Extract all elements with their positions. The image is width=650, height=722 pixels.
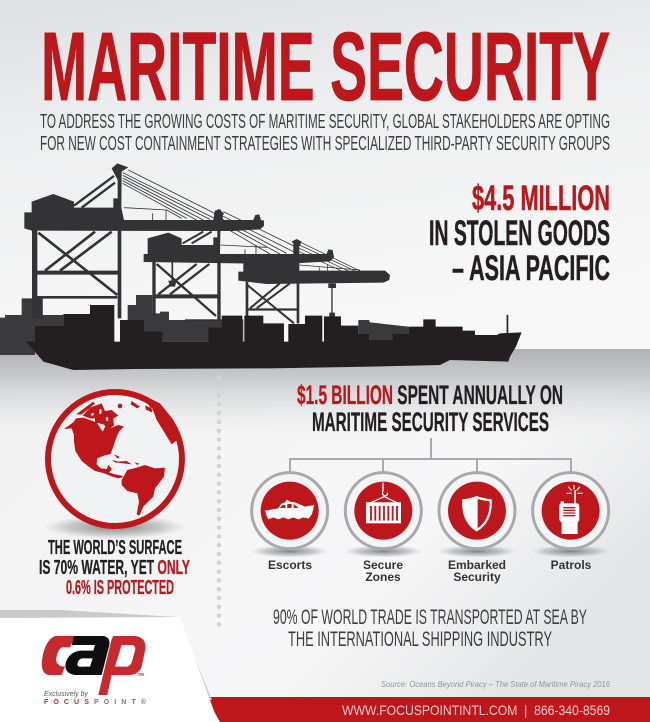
cap logo: TM (138, 672, 144, 677)
service labels: Embarked (448, 558, 506, 572)
service icons (250, 473, 610, 557)
logo tagline: Exclusively by (44, 691, 88, 698)
background lower panel (0, 349, 650, 722)
logo tagline: FOCUS POINT® (44, 698, 147, 706)
crane three (238, 239, 390, 323)
icon: patrols radio (531, 473, 610, 557)
icon: secure zones container (344, 473, 423, 557)
icon: embarked security shield (438, 473, 516, 557)
service labels: Patrols (551, 558, 592, 572)
trade statement (273, 606, 587, 651)
service labels: Secure (363, 558, 403, 572)
service labels (268, 558, 592, 584)
background water band (0, 349, 650, 441)
background sky (0, 0, 650, 350)
heading: security spend (297, 380, 563, 437)
service labels: Zones (365, 570, 401, 584)
globe shadow (43, 515, 187, 539)
globe caption: THE WORLD’S SURFACE (48, 537, 182, 559)
subtitle (40, 110, 610, 155)
continents (64, 418, 124, 478)
logo tagline (44, 691, 147, 706)
footer bar: WWW.FOCUSPOINTINTL.COM | 866-340-8569 (342, 702, 610, 718)
stat: stolen goods (429, 179, 610, 288)
dotted divider (217, 378, 221, 628)
crane one (24, 163, 264, 318)
globe disc (48, 392, 182, 526)
globe with shadow (43, 392, 187, 539)
footer bar (206, 697, 650, 722)
globe caption: 0.6% IS PROTECTED (66, 577, 174, 599)
connector tree (290, 438, 571, 472)
icon: escorts boat (250, 473, 329, 557)
container ship (26, 305, 522, 370)
shore buildings (0, 295, 408, 355)
globe caption: IS 70% WATER, YET ONLY (39, 557, 190, 579)
service labels: Escorts (268, 558, 312, 572)
port cranes and container ship silhouette (0, 163, 522, 370)
globe caption (39, 537, 190, 599)
crane two (144, 209, 334, 321)
service labels: Security (453, 570, 501, 584)
cap logo (42, 636, 145, 695)
logo panel (0, 610, 218, 722)
source note: Source: Oceans Beyond Piracy – The State of Maritime Piracy 2016 (381, 680, 611, 689)
